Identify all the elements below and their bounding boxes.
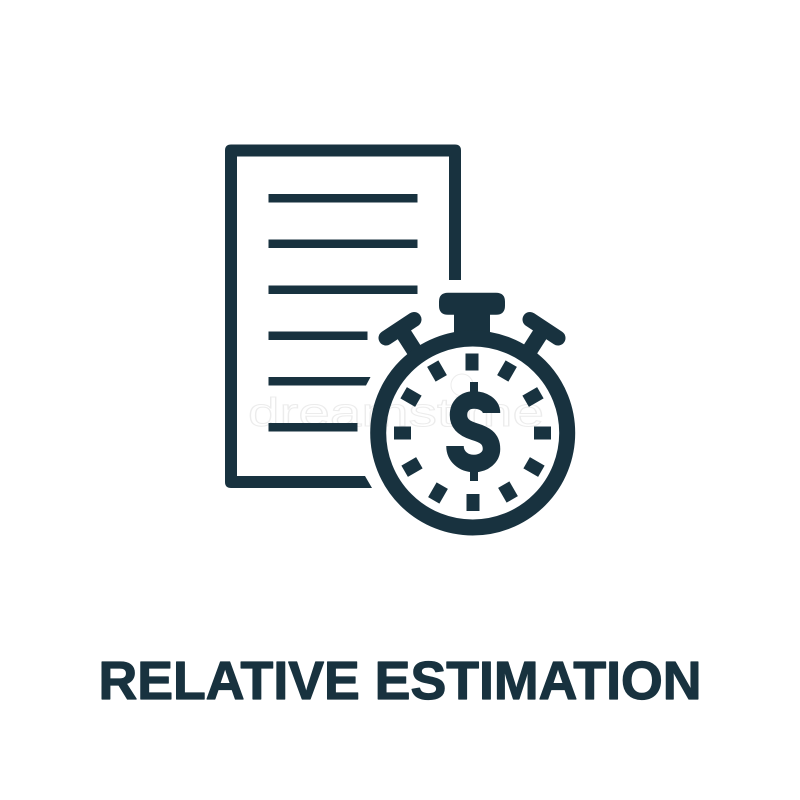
stopwatch hour ticks (394, 354, 551, 511)
watermark: dreamstime (248, 391, 544, 435)
stopwatch side buttons (386, 320, 558, 353)
document text lines (268, 194, 418, 432)
watermark (248, 374, 544, 435)
icon: document (225, 144, 461, 488)
document outline (225, 144, 461, 488)
title: RELATIVE ESTIMATION (98, 651, 702, 711)
icon: stopwatch (378, 293, 567, 528)
icon: dollar sign (455, 382, 492, 481)
stopwatch face ring (378, 338, 567, 528)
stopwatch top button (439, 293, 505, 340)
